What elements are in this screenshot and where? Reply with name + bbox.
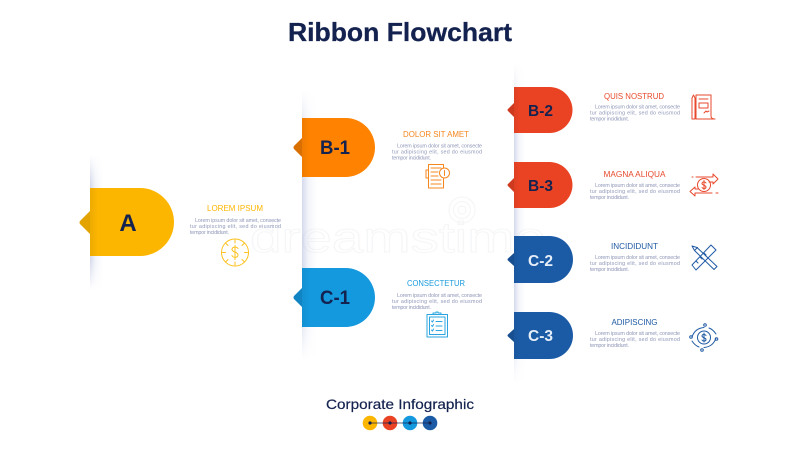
- text block: A: tur adipiscing elit, sed do eiusmod: [190, 224, 281, 230]
- text block: B-1: [392, 144, 482, 162]
- text block: C-1: Lorem ipsum dolor sit amet, consecte: [397, 293, 482, 299]
- text block: C-3: [590, 331, 680, 349]
- tab C-3: [508, 312, 573, 359]
- icon: money exchange arrows: [690, 174, 718, 196]
- tab B-3: B-3: [528, 178, 553, 195]
- text block: C-3: Lorem ipsum dolor sit amet, consecte: [595, 331, 680, 337]
- tab C-1: [294, 268, 375, 327]
- footer legend dots: [363, 416, 437, 430]
- text block: C-1: tur adipiscing elit, sed do eiusmod: [392, 299, 482, 305]
- tab C-2: C-2: [528, 253, 553, 270]
- text block: A: tempor incididunt.: [190, 230, 229, 236]
- icon: dollar clock: [222, 239, 248, 266]
- panel: C-3: [508, 312, 718, 359]
- text block: C-2: [590, 255, 680, 273]
- panel: B-2: [508, 87, 715, 133]
- text block: C-2: tur adipiscing elit, sed do eiusmod: [590, 261, 680, 267]
- tab C-2: [508, 236, 573, 283]
- text block: A: Lorem ipsum dolor sit amet, consecte: [195, 218, 281, 224]
- text block: C-1: tempor incididunt.: [392, 305, 431, 311]
- text block: C-2: Lorem ipsum dolor sit amet, consecte: [595, 255, 680, 261]
- panel: C-2: [508, 236, 717, 283]
- text block: B-3: tur adipiscing elit, sed do eiusmod: [590, 189, 680, 195]
- panel: C-1: [294, 268, 482, 337]
- text block: B-1: tempor incididunt.: [392, 156, 431, 162]
- icon: dollar network: [690, 324, 718, 351]
- title: Ribbon Flowchart: [288, 17, 512, 47]
- tab B-2: [508, 87, 572, 133]
- tab C-3: C-3: [528, 328, 553, 345]
- text block: B-3: Lorem ipsum dolor sit amet, consecte: [595, 183, 680, 189]
- text block: C-2: tempor incididunt.: [590, 267, 629, 273]
- text block: B-3: [590, 183, 680, 201]
- tab B-1: [294, 118, 375, 177]
- text block: B-2: tur adipiscing elit, sed do eiusmod: [590, 110, 680, 116]
- tab B-2: B-2: [528, 103, 553, 120]
- text block: C-3: tempor incididunt.: [590, 343, 629, 349]
- heading: Magna aliqua: MAGNA ALIQUA: [604, 170, 666, 179]
- text block: B-2: tempor incididunt.: [590, 116, 629, 122]
- text block: C-3: tur adipiscing elit, sed do eiusmod: [590, 337, 680, 343]
- heading: Adipiscing: ADIPISCING: [612, 318, 658, 327]
- heading: Dolor sit amet: DOLOR SIT AMET: [403, 130, 469, 139]
- watermark: dreamstime: [250, 214, 546, 262]
- tab B-3: [508, 162, 572, 208]
- text block: B-1: Lorem ipsum dolor sit amet, consecte: [397, 144, 482, 150]
- text block: B-1: tur adipiscing elit, sed do eiusmod: [392, 150, 482, 156]
- text block: B-3: tempor incididunt.: [590, 195, 629, 201]
- icon: clipboard checklist: [427, 312, 448, 337]
- text block: A: [190, 218, 281, 236]
- panel: A: [80, 188, 281, 266]
- watermark: [250, 197, 546, 262]
- tab C-1: C-1: [320, 287, 350, 309]
- panel: B-3: [508, 162, 718, 208]
- text block: B-2: [590, 104, 680, 122]
- footer heading: Corporate Infographic: [326, 396, 474, 412]
- heading: Quis nostrud: QUIS NOSTRUD: [604, 92, 664, 101]
- tab B-1: B-1: [320, 137, 350, 159]
- heading: Lorem ipsum: LOREM IPSUM: [207, 204, 263, 213]
- heading: Incididunt: INCIDIDUNT: [611, 242, 658, 251]
- icon: invoice with coin: [426, 164, 450, 188]
- tab A: [80, 188, 174, 256]
- icon: contract and pen: [692, 95, 715, 119]
- tab A: A: [119, 210, 137, 237]
- heading: Consectetur: CONSECTETUR: [407, 279, 465, 288]
- icon: crossed pencil and ruler: [692, 245, 717, 270]
- panel: B-1: [294, 118, 482, 188]
- text block: C-1: [392, 293, 482, 311]
- text block: B-2: Lorem ipsum dolor sit amet, consecte: [595, 104, 680, 110]
- ribbon shadow strips: [90, 62, 526, 384]
